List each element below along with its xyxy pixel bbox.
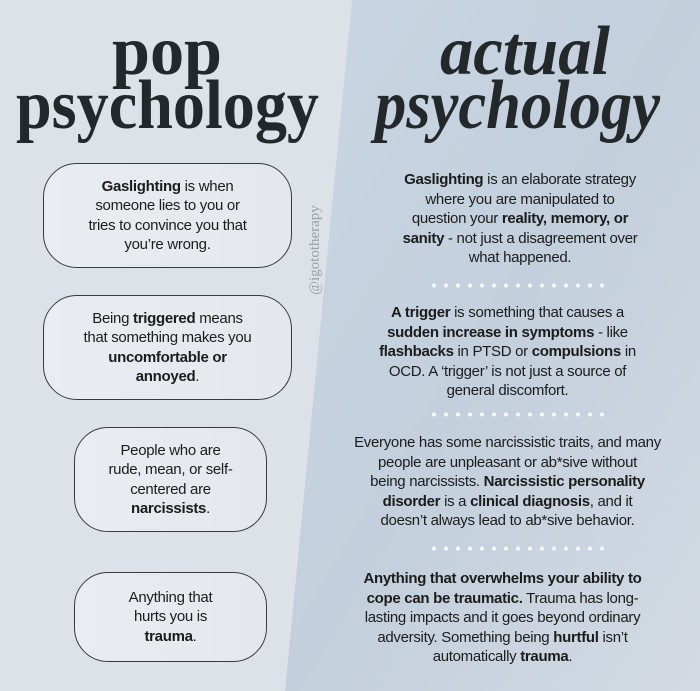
box: trauma pop: hurts you is <box>134 608 207 625</box>
text: trigger actual: flashbacks in PTSD or compulsions in <box>379 343 636 360</box>
text: narcissism actual: disorder is a clinical diagnosis, and it <box>383 492 632 510</box>
text: trauma actual: adversity. Something being hurtful isn’t <box>377 628 628 646</box>
text: narcissism actual <box>354 434 662 529</box>
text: narcissism actual: people are unpleasant or ab*sive without <box>378 454 637 470</box>
text: trauma actual: lasting impacts and it goes beyond ordinary <box>365 609 640 626</box>
box: narcissists pop: narcissists. <box>131 500 210 517</box>
text: gaslighting actual: question your reality, memory, or <box>412 210 628 227</box>
text: trauma actual <box>363 570 642 665</box>
title: pop psychology: psychology <box>16 67 319 144</box>
watermark: @igototherapy <box>307 205 323 295</box>
text: gaslighting actual: where you are manipulated to <box>425 190 615 208</box>
box: narcissists pop: People who are <box>120 442 221 458</box>
text: gaslighting actual: what happened. <box>469 249 571 266</box>
text: gaslighting actual <box>403 171 638 266</box>
text: trauma actual: automatically trauma. <box>433 648 572 665</box>
text: narcissism actual: Everyone has some narcissistic traits, and many <box>354 434 661 451</box>
box: gaslighting pop: you’re wrong. <box>124 236 211 253</box>
text: gaslighting actual: Gaslighting is an elaborate strategy <box>404 171 636 188</box>
title: actual psychology: actual <box>440 13 611 90</box>
text: gaslighting actual: sanity - not just a disagreement over <box>403 230 637 246</box>
box: triggered pop: uncomfortable or <box>108 348 227 366</box>
text: trauma actual: Anything that overwhelms your ability to <box>363 570 642 587</box>
box: narcissists pop: centered are <box>130 480 211 498</box>
box: trauma pop: trauma. <box>144 628 197 645</box>
box: gaslighting pop: Gaslighting is when <box>102 178 233 194</box>
box: triggered pop <box>43 295 292 400</box>
text: trigger actual: sudden increase in symptoms - like <box>387 324 628 340</box>
text: narcissism actual: doesn’t always lead to ab*sive behavior. <box>380 512 634 529</box>
text: trigger actual: A trigger is something that causes a <box>391 304 624 321</box>
box: trauma pop: Anything that <box>129 589 212 606</box>
box: gaslighting pop: tries to convince you that <box>88 216 247 234</box>
text: trauma actual: cope can be traumatic. Trauma has long- <box>367 590 638 606</box>
title: pop psychology: pop <box>112 13 222 90</box>
title: actual psychology: psychology <box>371 67 661 144</box>
text: trigger actual <box>379 304 636 399</box>
title: actual psychology <box>370 13 661 144</box>
text: trigger actual: OCD. A ‘trigger’ is not just a source of <box>389 362 626 380</box>
text: narcissism actual: being narcissists. Narcissistic personality <box>370 473 645 490</box>
box: triggered pop: annoyed. <box>136 368 199 385</box>
box: gaslighting pop <box>43 163 292 268</box>
text: trigger actual: general discomfort. <box>447 382 568 399</box>
box: trauma pop <box>74 572 267 662</box>
box: triggered pop: Being triggered means <box>92 310 243 326</box>
box: narcissists pop: rude, mean, or self- <box>108 461 233 478</box>
box: triggered pop: that something makes you <box>84 329 251 346</box>
box: narcissists pop <box>74 427 267 532</box>
title: pop psychology <box>16 13 319 144</box>
box: gaslighting pop: someone lies to you or <box>95 197 240 214</box>
